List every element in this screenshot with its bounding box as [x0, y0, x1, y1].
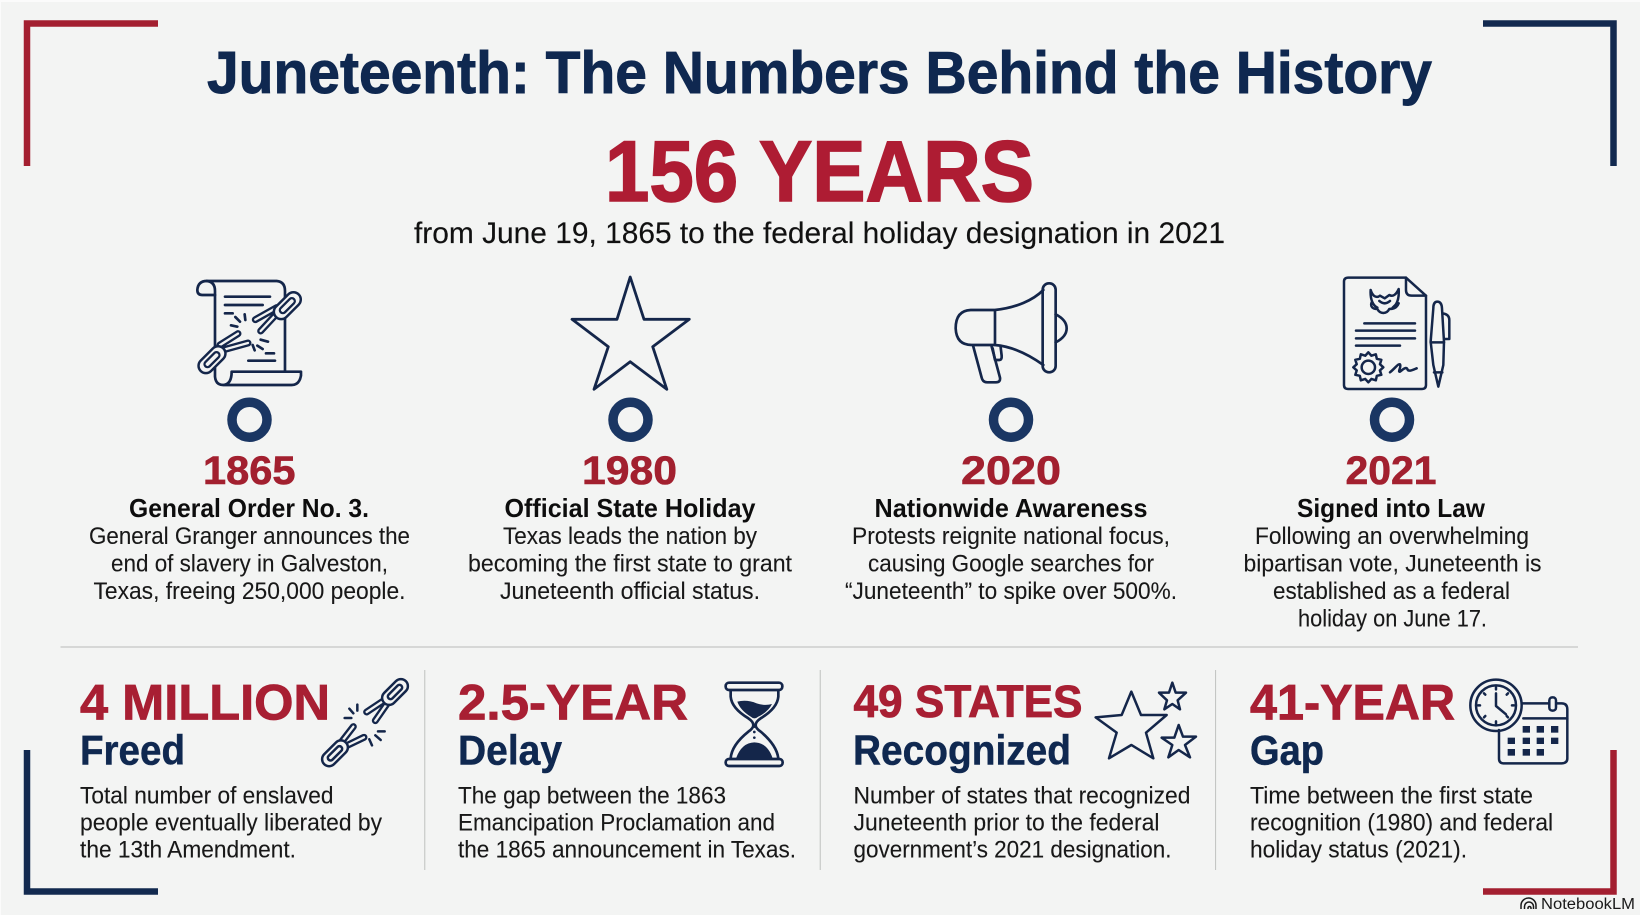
year: 2020: [961, 449, 1061, 493]
stat description: Juneteenth prior to the federal: [854, 810, 1160, 837]
event description: causing Google searches for: [868, 550, 1154, 578]
event description: end of slavery in Galveston,: [111, 550, 388, 578]
event description: Protests reignite national focus,: [852, 523, 1170, 550]
stat description: the 13th Amendment.: [80, 837, 296, 864]
icon: NotebookLM logo: [1521, 898, 1536, 909]
stat description: recognition (1980) and federal: [1250, 810, 1553, 837]
event description: bipartisan vote, Juneteenth is: [1244, 550, 1542, 578]
timeline column: 1865: [89, 281, 410, 605]
stat number: 41-YEAR: [1250, 674, 1455, 730]
wordmark: NotebookLM: [1541, 896, 1635, 913]
event description: General Granger announces the: [89, 523, 410, 550]
corner bracket: top right: [1483, 24, 1614, 166]
stat description: Time between the first state: [1250, 782, 1533, 809]
timeline marker: [1374, 402, 1410, 437]
event description: [468, 523, 792, 605]
event description: [89, 523, 410, 605]
stat description: Emancipation Proclamation and: [458, 810, 775, 837]
stat label: Recognized: [853, 726, 1071, 773]
event description: Texas leads the nation by: [503, 523, 757, 550]
stat description: Total number of enslaved: [80, 782, 334, 809]
stat number: 49 STATES: [854, 676, 1082, 727]
stat description: [854, 782, 1190, 864]
event description: [845, 523, 1177, 605]
icon: megaphone: [956, 283, 1067, 382]
event heading: Signed into Law: [1297, 493, 1486, 523]
stat description: Number of states that recognized: [854, 782, 1190, 809]
timeline column: 2021: [1244, 278, 1542, 632]
corner bracket: bottom left: [27, 750, 158, 892]
stat label: Gap: [1250, 726, 1324, 773]
icon: three stars: [1096, 683, 1196, 758]
event description: holiday on June 17.: [1298, 605, 1487, 632]
stat description: [80, 782, 382, 864]
timeline column: 1980: [468, 277, 792, 605]
stat description: [1250, 782, 1553, 864]
event heading: Nationwide Awareness: [874, 493, 1148, 523]
timeline marker: [994, 402, 1028, 437]
event description: Following an overwhelming: [1255, 523, 1529, 550]
subtitle: from June 19, 1865 to the federal holiday designation in 2021: [414, 217, 1225, 250]
icon: signed document and pen: [1344, 278, 1449, 389]
stat description: people eventually liberated by: [80, 810, 382, 837]
event heading: General Order No. 3.: [129, 493, 369, 523]
event description: established as a federal: [1273, 578, 1510, 605]
stat number: 4 MILLION: [80, 674, 330, 730]
year: 2021: [1346, 449, 1436, 493]
stat panel: 2.5-year delay: [458, 674, 796, 864]
icon: hourglass: [726, 683, 783, 766]
icon: star: [572, 277, 689, 389]
event description: “Juneteenth” to spike over 500%.: [845, 578, 1177, 605]
stat panel: 41-year gap: [1250, 674, 1567, 864]
event description: Texas, freeing 250,000 people.: [94, 578, 406, 605]
timeline marker: [613, 402, 648, 437]
stat description: the 1865 announcement in Texas.: [458, 837, 796, 864]
event description: [1244, 523, 1542, 632]
headline stat: 156 years: 156 YEARS: [605, 124, 1034, 220]
stat label: Delay: [458, 726, 563, 773]
corner bracket: bottom right: [1483, 750, 1614, 892]
icon: clock and calendar: [1470, 680, 1567, 763]
icon: broken chain: [319, 676, 411, 769]
icon: scroll with broken chain: [195, 281, 304, 385]
stat number: 2.5-YEAR: [458, 674, 688, 730]
event description: becoming the first state to grant: [468, 550, 792, 578]
stat panel: 49 states recognized: [853, 676, 1196, 864]
stat description: government’s 2021 designation.: [854, 837, 1172, 864]
corner bracket: top left: [27, 24, 158, 166]
event description: Juneteenth official status.: [500, 578, 760, 605]
timeline marker: [232, 402, 267, 437]
stat description: holiday status (2021).: [1250, 837, 1467, 864]
stat panel: 4 million freed: [80, 674, 411, 864]
timeline column: 2020: [845, 283, 1177, 605]
stat label: Freed: [80, 726, 185, 773]
event heading: Official State Holiday: [504, 493, 756, 523]
title: Juneteenth: The Numbers Behind the History: [207, 40, 1432, 106]
year: 1980: [582, 449, 677, 493]
watermark: NotebookLM: [1521, 896, 1635, 913]
stat description: [458, 782, 796, 864]
stat description: The gap between the 1863: [458, 782, 726, 809]
year: 1865: [203, 449, 296, 493]
